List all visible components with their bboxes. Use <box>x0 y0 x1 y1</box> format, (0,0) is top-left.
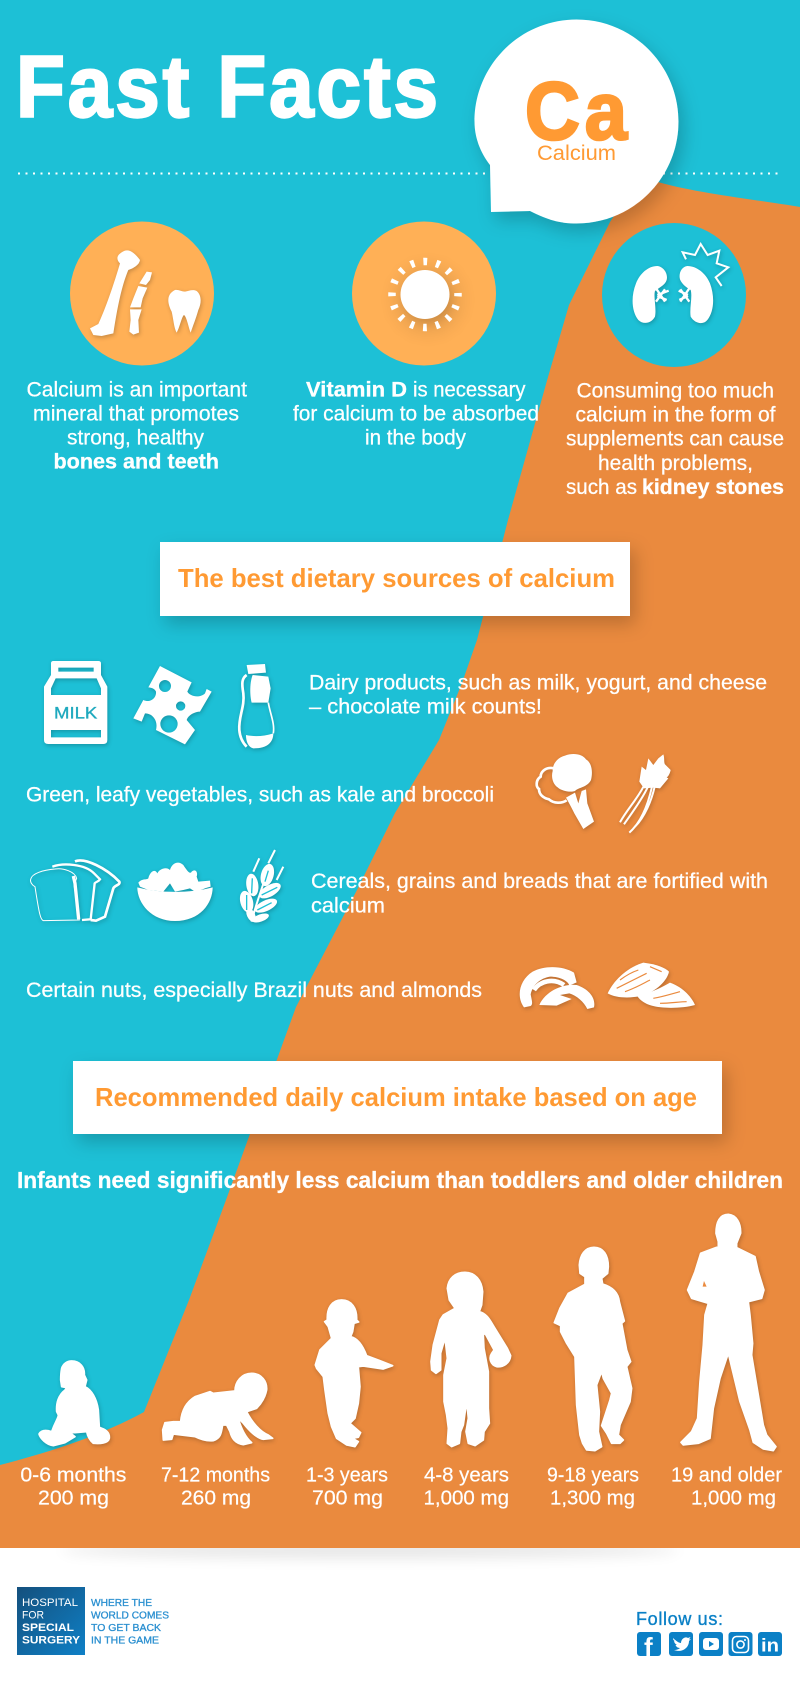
text: kidney stones: Consuming too much <box>576 379 774 402</box>
age label: 4-8 years: 4-8 years <box>424 1465 509 1487</box>
icon: youtube <box>699 1632 723 1656</box>
logo: Hospital for Special Surgery: HOSPITAL <box>22 1597 78 1609</box>
Calcium label: Calcium <box>537 142 616 165</box>
icon: facebook: f <box>644 1632 653 1662</box>
icon: bones and tooth <box>90 250 201 336</box>
dotted divider <box>18 172 783 174</box>
age label: 4-8 years: 1,000 mg <box>424 1487 509 1509</box>
text: kidney stones: health problems, <box>598 452 753 475</box>
age label: 1-3 years <box>306 1465 388 1509</box>
icon: wheat <box>238 850 283 924</box>
age label: 19 and older: 19 and older <box>671 1465 782 1487</box>
text: cereals <box>311 870 768 918</box>
heading: best dietary sources <box>160 542 630 616</box>
text: kidney stones: calcium in the form of <box>576 404 776 426</box>
silhouette: child with ball <box>431 1272 511 1447</box>
heading: best dietary sources: The best dietary sources of calcium <box>178 563 615 593</box>
footer shadow <box>60 1542 680 1558</box>
icon: facebook <box>637 1632 661 1662</box>
text: nuts: Certain nuts, especially Brazil nuts and almonds <box>26 979 482 1002</box>
age label: 7-12 months: 7-12 months <box>161 1465 270 1487</box>
logo tagline: IN THE GAME <box>91 1634 159 1646</box>
text: vitamin D <box>293 378 539 450</box>
bubble shape <box>474 20 678 224</box>
logo tagline: WHERE THE <box>91 1597 152 1609</box>
icon: instagram <box>728 1632 752 1656</box>
silhouette: adult <box>681 1214 776 1451</box>
panel: kidney stones <box>566 223 784 499</box>
icon circle <box>602 223 746 367</box>
silhouette: crawling baby <box>163 1373 273 1445</box>
silhouette: sitting baby <box>39 1361 109 1446</box>
icon circle <box>352 222 496 366</box>
text: vegetables: Green, leafy vegetables, such as kale and broccoli <box>26 784 494 807</box>
age label: 9-18 years <box>547 1465 639 1509</box>
age label: 7-12 months: 260 mg <box>181 1487 251 1509</box>
text: vitamin D: Vitamin D <box>306 378 407 402</box>
logo: Hospital for Special Surgery: SURGERY <box>22 1634 80 1646</box>
text: dairy <box>309 672 767 718</box>
logo: Hospital for Special Surgery: FOR <box>22 1610 44 1622</box>
text: kidney stones: kidney stones <box>642 476 784 499</box>
icon: milk carton: MILK <box>54 704 98 723</box>
text: follow us: Follow us: <box>636 1609 723 1629</box>
text: vitamin D: in the body <box>365 426 466 450</box>
text: dairy: – chocolate milk counts! <box>309 696 542 718</box>
age label: 0-6 months: 0-6 months <box>20 1465 126 1487</box>
calcium speech bubble <box>474 20 678 224</box>
icon: twitter <box>669 1632 693 1656</box>
logo: Hospital for Special Surgery: SPECIAL <box>22 1622 74 1634</box>
age label: 1-3 years: 1-3 years <box>306 1465 388 1487</box>
text: calcium mineral <box>26 378 247 474</box>
icon: almonds <box>608 963 695 1008</box>
age label: 9-18 years: 9-18 years <box>547 1465 639 1487</box>
logo tagline <box>91 1597 169 1646</box>
age label: 7-12 months <box>161 1465 270 1509</box>
icon: brazil nuts <box>520 967 594 1009</box>
silhouette: toddler <box>315 1300 393 1447</box>
silhouette: teen <box>554 1247 632 1451</box>
title: Fast Facts <box>16 37 438 135</box>
Ca symbol: Ca <box>525 64 628 157</box>
icon: milk carton <box>44 661 107 744</box>
icon: bread <box>31 860 120 921</box>
age label: 4-8 years <box>424 1465 509 1509</box>
text: cereals: calcium <box>311 894 385 918</box>
heading: recommended daily intake <box>73 1061 722 1134</box>
heading: recommended daily intake: Recommended daily calcium intake based on age <box>95 1082 697 1112</box>
text: calcium mineral: Calcium is an important <box>26 378 247 402</box>
icon: cereal bowl <box>137 863 213 921</box>
logo tagline: TO GET BACK <box>91 1622 161 1634</box>
icon: kale <box>620 754 671 833</box>
text: dairy: Dairy products, such as milk, yogurt, and cheese <box>309 672 767 694</box>
subheading: Infants need significantly less calcium than toddlers and older children <box>17 1167 783 1193</box>
icon: kidneys <box>633 244 728 323</box>
icon: cheese <box>133 666 212 744</box>
panel: bones and teeth <box>26 222 247 474</box>
icon: linkedin <box>758 1632 782 1656</box>
icon: broccoli <box>537 754 594 829</box>
icon: sun <box>392 262 458 328</box>
age label: 1-3 years: 700 mg <box>312 1487 383 1509</box>
text: kidney stones <box>566 379 784 499</box>
age label: 0-6 months <box>20 1465 126 1509</box>
text: vitamin D: for calcium to be absorbed <box>293 402 539 426</box>
text: kidney stones: supplements can cause <box>566 428 784 451</box>
age label: 19 and older <box>671 1465 782 1509</box>
icon: linkedin: in <box>761 1636 779 1656</box>
age label: 19 and older: 1,000 mg <box>691 1487 776 1509</box>
logo: Hospital for Special Surgery <box>17 1587 85 1655</box>
text: calcium mineral: strong, healthy <box>67 426 204 450</box>
text: cereals: Cereals, grains and breads that are fortified with <box>311 870 768 893</box>
text: calcium mineral: mineral that promotes <box>33 402 239 426</box>
text: vitamin D: is necessary <box>413 378 526 402</box>
panel: vitamin D <box>293 222 539 450</box>
age label: 0-6 months: 200 mg <box>38 1487 109 1509</box>
age label: 9-18 years: 1,300 mg <box>550 1487 635 1509</box>
icon circle <box>70 222 214 366</box>
text: calcium mineral: bones and teeth <box>54 450 219 474</box>
logo tagline: WORLD COMES <box>91 1610 169 1622</box>
icon: yogurt bottle <box>239 664 274 748</box>
text: kidney stones: such as <box>566 476 637 499</box>
